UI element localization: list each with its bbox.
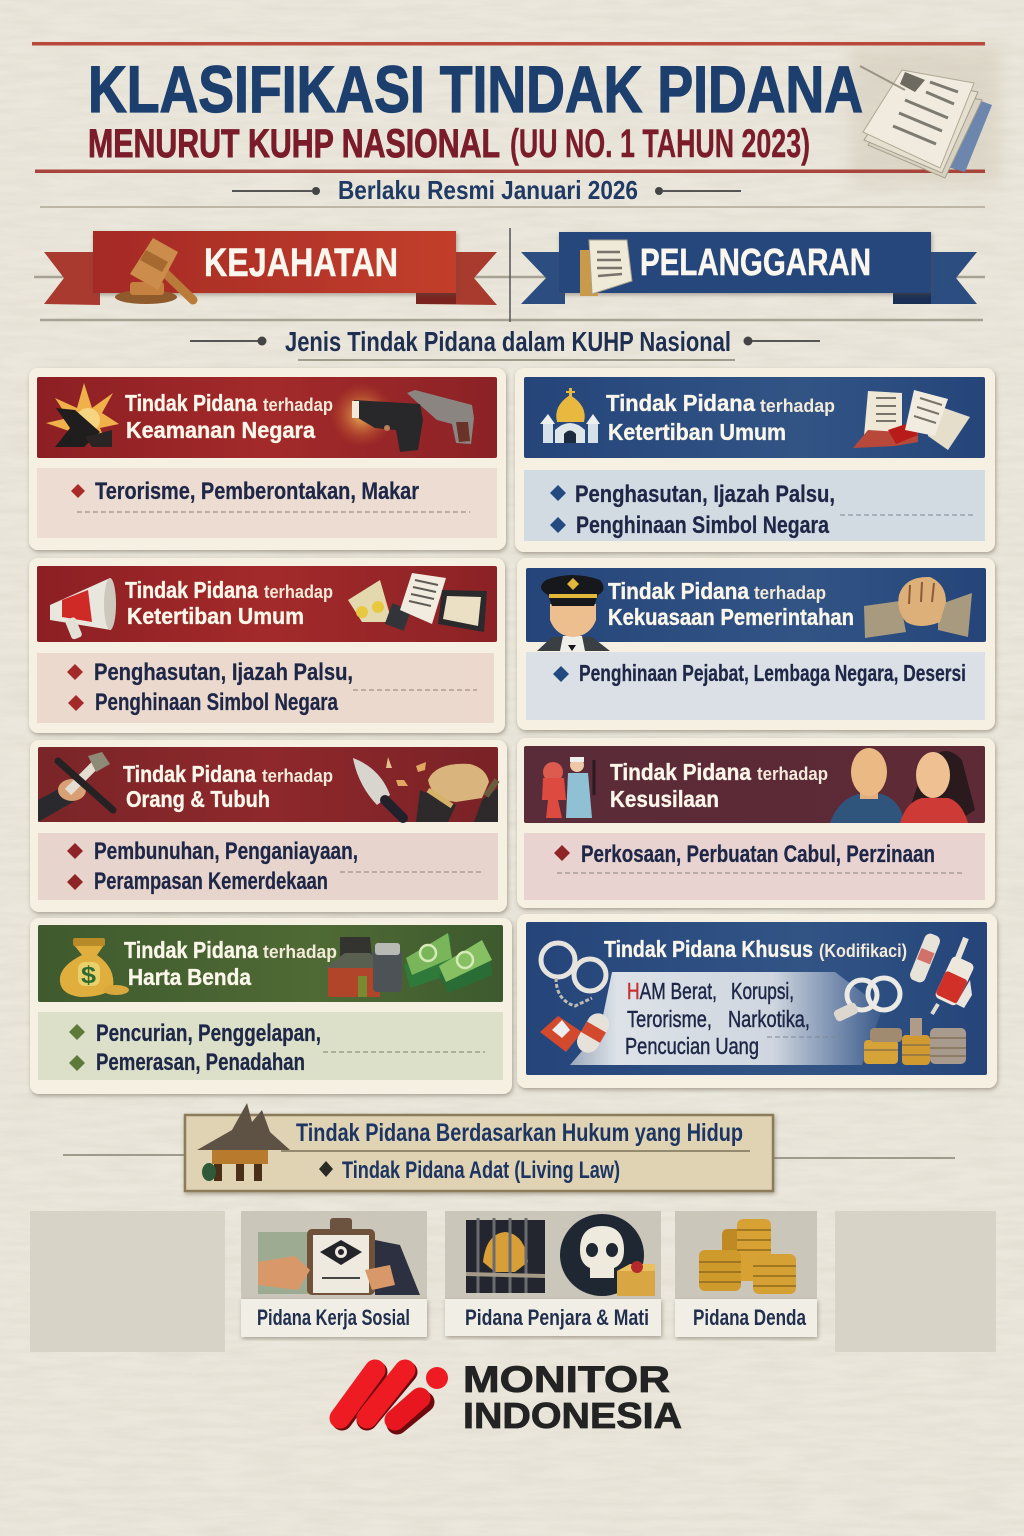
list: Narkotika, (728, 1006, 810, 1032)
icon: stacked documents (860, 66, 992, 178)
label: Pidana Denda (693, 1305, 807, 1330)
icon: house (325, 937, 382, 997)
icon: raised fist (864, 577, 972, 638)
icon: box (617, 1261, 655, 1296)
header text: Tindak Pidana Khusus (604, 936, 813, 962)
list: Penghasutan, Ijazah Palsu, (94, 659, 353, 686)
header text: Ketertiban Umum (127, 603, 304, 629)
panel: kekuasaan pemerintahan (517, 558, 995, 730)
icon: syringes (908, 932, 975, 1014)
panel: hukum yang hidup (63, 1103, 955, 1191)
list: Penghinaan Simbol Negara (95, 689, 339, 716)
icon: handcuffs (541, 943, 606, 1006)
list: HAM Berat, (627, 978, 717, 1004)
header text: Tindak Pidana (606, 390, 755, 416)
header text: terhadap (754, 583, 826, 603)
label: Pidana Penjara & Mati (465, 1305, 649, 1330)
header text: Harta Benda (128, 964, 251, 990)
header text (125, 390, 333, 443)
header text: Tindak Pidana (610, 759, 751, 785)
list: Penghasutan, Ijazah Palsu, (575, 481, 835, 508)
list (67, 659, 477, 716)
icon: two small figures (542, 757, 594, 818)
text: Tindak Pidana Berdasarkan Hukum yang Hidup (296, 1119, 743, 1147)
list (550, 481, 975, 539)
panel: ketertiban umum (pelanggaran) (515, 368, 995, 552)
list (69, 1020, 485, 1076)
panel: keamanan negara (29, 368, 506, 550)
subheading: berlaku (232, 175, 741, 205)
banner: pelanggaran: PELANGGARAN (640, 242, 871, 284)
subheading: berlaku: Berlaku Resmi Januari 2026 (338, 175, 638, 205)
header text (123, 761, 333, 812)
icon: jail (466, 1218, 545, 1293)
header text (606, 390, 835, 445)
logo: monitor indonesia (340, 1359, 682, 1436)
icon: clipboard and hands (258, 1218, 420, 1295)
logo mark (340, 1367, 448, 1424)
icon: mosque (540, 388, 600, 443)
banner: kejahatan: KEJAHATAN (204, 241, 398, 285)
list: Perampasan Kemerdekaan (94, 868, 328, 895)
empty placeholder box left (30, 1211, 225, 1352)
header text (124, 937, 337, 990)
title (88, 52, 863, 166)
icon: box and pill (540, 1009, 613, 1057)
icon: papers (853, 390, 970, 450)
banner: kejahatan (44, 231, 497, 305)
panel: kesusilaan (517, 738, 995, 908)
text: Tindak Pidana Adat (Living Law) (342, 1157, 620, 1184)
icon: explosion (46, 383, 119, 447)
list (625, 978, 842, 1059)
list: Pencucian Uang (625, 1033, 759, 1059)
panel: tindak pidana khusus (517, 914, 997, 1088)
icon: money bag: $ (81, 962, 97, 989)
list: Pembunuhan, Penganiayaan, (94, 838, 358, 865)
wordmark: INDONESIA (463, 1395, 682, 1436)
list: Korupsi, (731, 978, 794, 1004)
list: Terorisme, Pemberontakan, Makar (95, 478, 419, 505)
icon: banknotes (404, 933, 492, 993)
list: Pencurian, Penggelapan, (96, 1020, 321, 1047)
list (67, 838, 482, 895)
icon: skull (560, 1214, 644, 1296)
panel: orang dan tubuh (30, 740, 507, 912)
icon: knife (353, 757, 426, 818)
icon: gold coins (699, 1219, 796, 1294)
empty placeholder box right (835, 1211, 996, 1352)
header text: terhadap (262, 766, 333, 786)
header text: Tindak Pidana (125, 390, 257, 416)
label: Pidana Kerja Sosial (257, 1305, 410, 1330)
panel: pidana denda (675, 1211, 817, 1337)
icon: traditional house (197, 1103, 290, 1181)
header text: Tindak Pidana (125, 577, 258, 603)
header text: Ketertiban Umum (608, 419, 786, 445)
header text: Kesusilaan (610, 786, 719, 812)
subtitle: (UU NO. 1 TAHUN 2023) (510, 122, 810, 166)
panel: ketertiban umum (kejahatan) (29, 558, 505, 733)
header text: terhadap (263, 942, 337, 962)
header text: (Kodifikaci) (819, 941, 907, 961)
icon: bound fists (416, 764, 498, 822)
icon: documents and clipboard (348, 573, 487, 632)
header text (125, 577, 333, 629)
section heading: Jenis Tindak Pidana dalam KUHP Nasional (285, 326, 731, 357)
subtitle: MENURUT KUHP NASIONAL (88, 122, 500, 166)
icon: megaphone (50, 578, 116, 640)
icon: gavel (115, 238, 193, 304)
header text: terhadap (760, 396, 835, 416)
header text: terhadap (263, 395, 333, 415)
banner: pelanggaran (521, 232, 977, 304)
header text: Tindak Pidana (608, 578, 749, 604)
title: KLASIFIKASI TINDAK PIDANA (88, 52, 863, 126)
panel: harta benda (30, 918, 512, 1094)
divider lines behind banners (34, 228, 985, 322)
header text: Tindak Pidana (123, 761, 256, 787)
header text: Tindak Pidana (124, 937, 258, 963)
header rule lines (32, 42, 985, 208)
list: Pemerasan, Penadahan (96, 1049, 305, 1076)
header text: Kekuasaan Pemerintahan (608, 604, 854, 630)
list: Penghinaan Simbol Negara (576, 512, 830, 539)
header text: Orang & Tubuh (126, 786, 270, 812)
icon: document (580, 240, 632, 296)
icon: canister (373, 943, 402, 992)
icon: handcuffs closed (833, 978, 900, 1023)
list: Terorisme, (627, 1006, 712, 1032)
header text: Keamanan Negara (126, 417, 315, 443)
header text (610, 759, 828, 812)
icon: hammer and hand (38, 752, 113, 822)
icon: man and woman (830, 748, 975, 823)
wordmark: MONITOR (463, 1359, 670, 1400)
icon: officer (537, 575, 610, 651)
icon: pistols (352, 390, 474, 452)
header text: terhadap (264, 582, 333, 602)
icon: money bag (60, 938, 129, 997)
list: Perkosaan, Perbuatan Cabul, Perzinaan (581, 841, 935, 868)
wordmark (463, 1359, 682, 1436)
panel: pidana kerja sosial (241, 1211, 427, 1337)
list (554, 841, 963, 873)
header text (608, 578, 854, 630)
panel: pidana penjara dan mati (445, 1211, 661, 1336)
text (281, 1119, 750, 1184)
icon: coin stacks (864, 1018, 966, 1065)
header text: terhadap (757, 764, 828, 784)
